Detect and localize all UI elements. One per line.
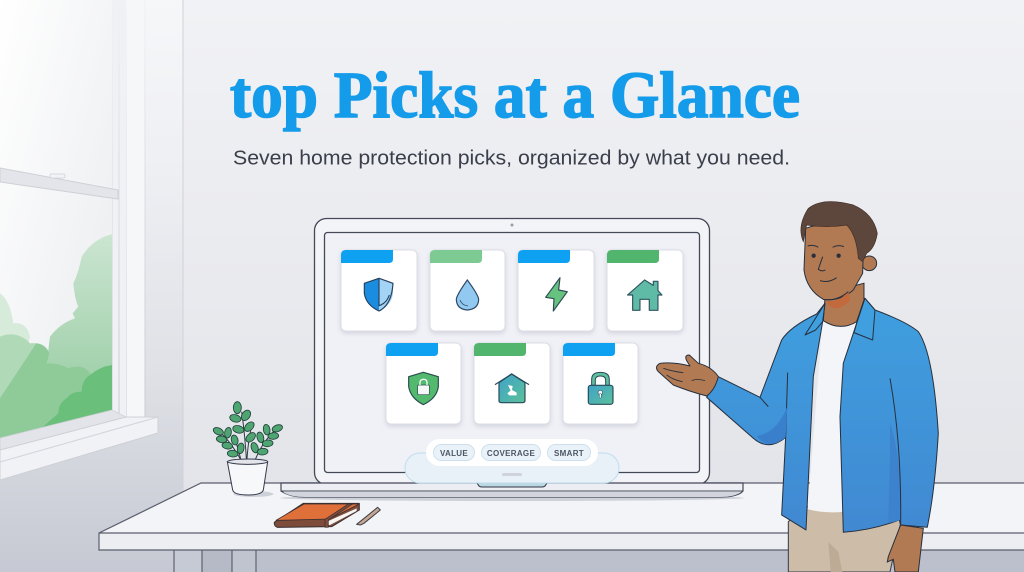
card: water drop xyxy=(430,250,505,331)
pointing hand xyxy=(657,355,718,396)
lower sash and sill xyxy=(0,168,118,199)
laptop xyxy=(280,218,744,501)
trees outside the window xyxy=(0,234,112,440)
neck xyxy=(823,283,864,326)
hair xyxy=(801,202,877,262)
collar xyxy=(805,298,875,340)
plant xyxy=(212,402,283,497)
icon: padlock xyxy=(588,372,613,404)
desk xyxy=(99,483,1024,572)
card: lightning xyxy=(518,250,594,331)
chip: coverage xyxy=(482,444,540,460)
chip: smart xyxy=(548,444,590,460)
trousers xyxy=(788,507,902,572)
t-shirt xyxy=(808,321,857,512)
card: padlock xyxy=(563,343,638,424)
icon: shield with lock xyxy=(409,372,438,405)
icon: half shield xyxy=(364,278,393,311)
dock xyxy=(405,453,619,487)
card: shield lock xyxy=(386,343,461,424)
chip: value: VALUE xyxy=(440,449,468,458)
title: top Picks at a Glance xyxy=(230,59,800,132)
filter chips xyxy=(426,439,598,466)
icon: water drop xyxy=(456,280,479,310)
subtitle: Seven home protection picks, organized by what you need. xyxy=(233,148,790,170)
ear xyxy=(862,256,877,271)
chip: smart: SMART xyxy=(554,449,584,458)
chip: value xyxy=(434,444,474,460)
jacket left side with sleeve xyxy=(707,303,825,530)
window xyxy=(0,0,183,572)
card: home with foot xyxy=(474,343,550,424)
card: shield xyxy=(341,250,417,331)
person presenter xyxy=(657,202,938,572)
jacket right side xyxy=(840,298,938,532)
notebook xyxy=(274,503,380,527)
icon: home with boot xyxy=(495,374,529,403)
icon: lightning bolt xyxy=(546,278,567,311)
chin shadow xyxy=(825,292,850,308)
icon: house xyxy=(628,280,662,310)
face xyxy=(804,224,864,300)
facial features xyxy=(808,245,848,300)
right hand xyxy=(887,525,923,572)
pencil xyxy=(357,507,380,525)
card: house xyxy=(607,250,683,331)
chip: coverage: COVERAGE xyxy=(487,449,535,458)
